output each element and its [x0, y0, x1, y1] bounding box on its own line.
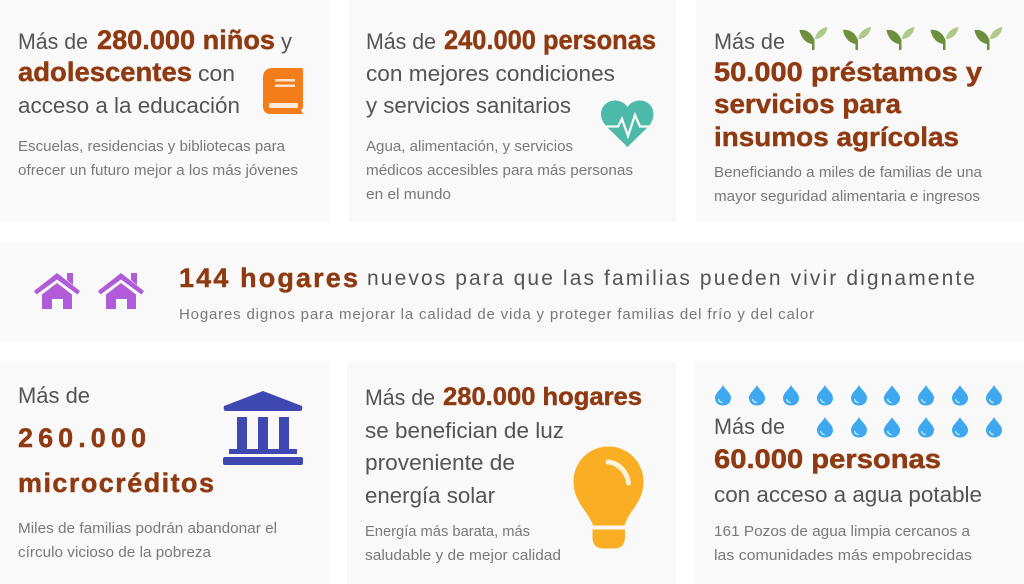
icon: light bulb — [574, 446, 644, 548]
text: agriculture description: Beneficiando a miles de familias de una — [714, 164, 983, 181]
heading: health — [366, 25, 656, 118]
heading: education: adolescentes — [18, 57, 192, 87]
panel: health — [349, 0, 676, 222]
heading: agriculture: servicios para — [714, 89, 902, 119]
text: water description: 161 Pozos de agua limpia cercanos a — [714, 523, 971, 540]
panel: solar energy — [347, 361, 676, 584]
heading: housing: nuevos para que las familias pueden vivir dignamente — [367, 267, 975, 290]
heading: solar energy: proveniente de — [365, 450, 515, 475]
icons: sprouts — [800, 27, 1002, 50]
text: water description — [714, 523, 972, 564]
icon: heart with pulse — [601, 100, 654, 147]
panel: microcredits — [0, 361, 329, 584]
text: microcredits description — [18, 520, 277, 561]
text: education description — [18, 138, 298, 179]
heading: health: y servicios sanitarios — [366, 93, 571, 118]
text: health description — [366, 138, 633, 203]
text: water description: las comunidades más empobrecidas — [714, 547, 972, 564]
text: housing description: Hogares dignos para mejorar la calidad de vida y proteger familias del frío y del calor — [179, 306, 814, 323]
icon: book — [263, 68, 303, 114]
text: solar description: saludable y de mejor calidad — [365, 547, 561, 564]
heading: drinking water: 60.000 personas — [714, 444, 941, 474]
heading: education: 280.000 niños — [97, 25, 275, 55]
heading: education: y — [281, 29, 293, 54]
panel: drinking water — [695, 361, 1024, 584]
text: education description: Escuelas, residencias y bibliotecas para — [18, 138, 286, 155]
heading: microcredits: microcréditos — [18, 468, 214, 498]
text: health description: Agua, alimentación, y servicios — [366, 138, 573, 155]
heading: agriculture: insumos agrícolas — [714, 122, 959, 152]
heading: drinking water: Más de — [714, 414, 785, 439]
heading: agriculture — [714, 29, 982, 152]
icons: water drops — [715, 385, 1002, 438]
panel: housing band — [0, 242, 1024, 342]
heading: microcredits: 260.000 — [18, 423, 146, 453]
text: health description: en el mundo — [366, 186, 451, 203]
heading: agriculture: Más de — [714, 29, 785, 54]
panel: agriculture — [696, 0, 1024, 222]
text: microcredits description: Miles de familias podrán abandonar el — [18, 520, 277, 537]
heading: drinking water — [714, 414, 982, 507]
heading: solar energy: Más de — [365, 385, 435, 410]
text: health description: médicos accesibles para más personas — [366, 162, 633, 179]
heading: agriculture: 50.000 préstamos y — [714, 57, 982, 87]
heading: solar energy — [365, 383, 642, 508]
heading: education — [18, 25, 293, 118]
text: solar description: Energía más barata, más — [365, 523, 530, 540]
heading: health: 240.000 personas — [444, 25, 656, 55]
text: agriculture description — [714, 164, 983, 205]
heading: microcredits — [18, 383, 214, 498]
heading: health: con mejores condiciones — [366, 61, 615, 86]
icons: houses — [34, 273, 144, 309]
text: education description: ofrecer un futuro mejor a los más jóvenes — [18, 162, 298, 179]
heading: education: con — [198, 61, 235, 86]
heading: solar energy: energía solar — [365, 483, 495, 508]
heading: health: Más de — [366, 29, 436, 54]
heading: solar energy: 280.000 hogares — [443, 383, 642, 411]
heading: drinking water: con acceso a agua potable — [714, 482, 982, 507]
heading: housing — [179, 263, 975, 293]
text: microcredits description: círculo vicioso de la pobreza — [18, 544, 212, 561]
panel: education — [0, 0, 329, 222]
heading: education: acceso a la educación — [18, 93, 240, 118]
text: agriculture description: mayor seguridad alimentaria e ingresos — [714, 188, 980, 205]
heading: microcredits: Más de — [18, 383, 90, 408]
heading: education: Más de — [18, 29, 88, 54]
heading: housing: 144 hogares — [179, 263, 358, 293]
heading: solar energy: se benefician de luz — [365, 418, 564, 443]
text: solar description — [365, 523, 561, 564]
icon: bank — [223, 391, 303, 465]
